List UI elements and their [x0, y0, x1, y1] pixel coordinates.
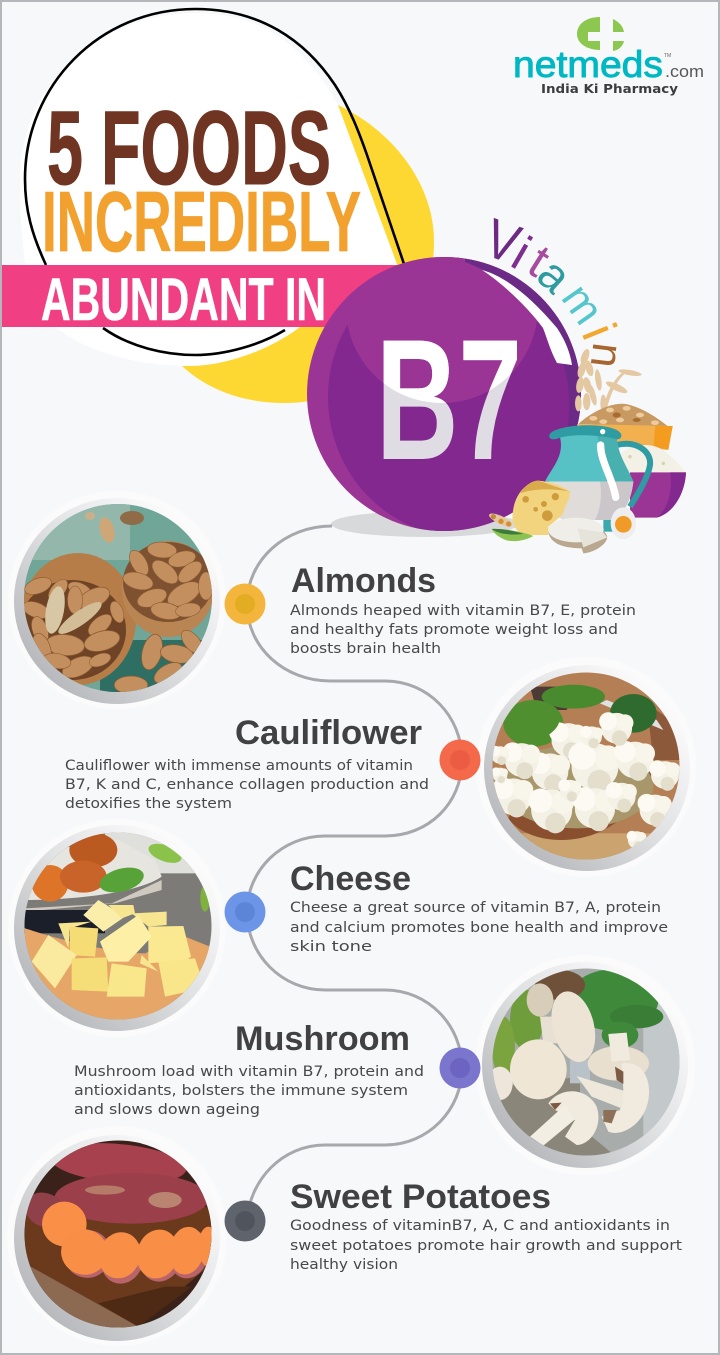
text: cheese: Cheese [290, 860, 411, 898]
vitamin sphere: B7 [376, 304, 522, 496]
text: almonds [290, 562, 636, 657]
white title egg with black outline [20, 9, 404, 366]
pitcher handle [617, 444, 650, 507]
text: mushroom: antioxidants, bolsters the immune system [74, 1083, 408, 1099]
dot: almonds [224, 584, 266, 624]
photo: mushroom [482, 964, 686, 1168]
title: INCREDIBLY [42, 175, 361, 270]
logo: netmeds: .com [665, 62, 704, 81]
curved word Vitamin: i [571, 316, 627, 347]
text: cheese: Cheese a great source of vitamin B7, A, protein [290, 900, 661, 916]
vitamin sphere [307, 257, 581, 531]
egg [611, 507, 636, 539]
logo: netmeds: netmeds [513, 44, 663, 85]
photo: cauliflower [484, 666, 688, 871]
connector path [247, 526, 462, 1220]
wheat [575, 348, 642, 422]
text: mushroom: Mushroom load with vitamin B7, protein and [74, 1064, 424, 1080]
cheese wedge [512, 481, 570, 535]
title [41, 90, 361, 333]
text: almonds: and healthy fats promote weight loss and [290, 622, 618, 638]
dot: cheese [224, 892, 266, 932]
text: mushroom: Mushroom [235, 1020, 410, 1058]
grain mound [578, 404, 668, 427]
text: almonds: Almonds heaped with vitamin B7, E, protein [290, 603, 636, 619]
text: cauliflower: Cauliflower [235, 714, 422, 752]
yellow blob behind title [181, 105, 434, 403]
text: mushroom: and slows down ageing [74, 1102, 260, 1118]
dot: sweet potatoes [224, 1200, 266, 1242]
text: almonds: Almonds [291, 562, 436, 600]
purple bowl [630, 472, 686, 518]
text: cauliflower: Cauliflower with immense amounts of vitamin [65, 758, 413, 774]
food illustration group [487, 348, 686, 553]
text: cauliflower [65, 714, 429, 812]
logo: netmeds: India Ki Pharmacy [541, 82, 678, 96]
round cheese [548, 523, 607, 553]
text: sweet potatoes: Sweet Potatoes [290, 1178, 551, 1216]
curved word Vitamin: i [503, 226, 540, 280]
orange bowl [577, 424, 673, 450]
curved word Vitamin [477, 206, 632, 371]
text: sweet potatoes: sweet potatoes promote hair growth and support [290, 1238, 682, 1254]
text: cheese: and calcium promotes bone health and improve [290, 920, 668, 936]
curved word Vitamin: n [581, 340, 632, 371]
text: cheese [290, 860, 668, 955]
logo: netmeds [513, 17, 704, 96]
text: cauliflower: B7, K and C, enhance collagen production and [65, 777, 429, 793]
sphere shadow [331, 511, 519, 537]
photo: cheese [14, 826, 218, 1031]
text: sweet potatoes: Goodness of vitaminB7, A, C and antioxidants in [290, 1218, 670, 1234]
text: almonds: boosts brain health [290, 641, 441, 657]
dot: cauliflower [440, 740, 480, 780]
photo: almonds [14, 500, 218, 704]
curved word Vitamin: a [528, 247, 582, 303]
curved word Vitamin: m [552, 275, 613, 333]
dot: mushroom [440, 1048, 480, 1088]
text: sweet potatoes [290, 1178, 682, 1273]
curved word Vitamin: t [519, 235, 558, 287]
vitamin sphere: B7 [376, 304, 522, 496]
curved word Vitamin: V [477, 206, 528, 275]
pitcher body [603, 520, 617, 532]
text: cheese: skin tone [290, 939, 372, 955]
logo: netmeds: TM [664, 53, 671, 59]
pink banner [2, 265, 422, 327]
text: sweet potatoes: healthy vision [290, 1257, 398, 1273]
text: mushroom [74, 1020, 424, 1118]
photo: sweet potatoes [14, 1136, 218, 1341]
title: ABUNDANT IN [41, 266, 326, 333]
rice [617, 445, 685, 472]
title: 5 FOODS [47, 90, 331, 207]
peas [487, 511, 533, 541]
text: cauliflower: detoxifies the system [65, 796, 232, 812]
